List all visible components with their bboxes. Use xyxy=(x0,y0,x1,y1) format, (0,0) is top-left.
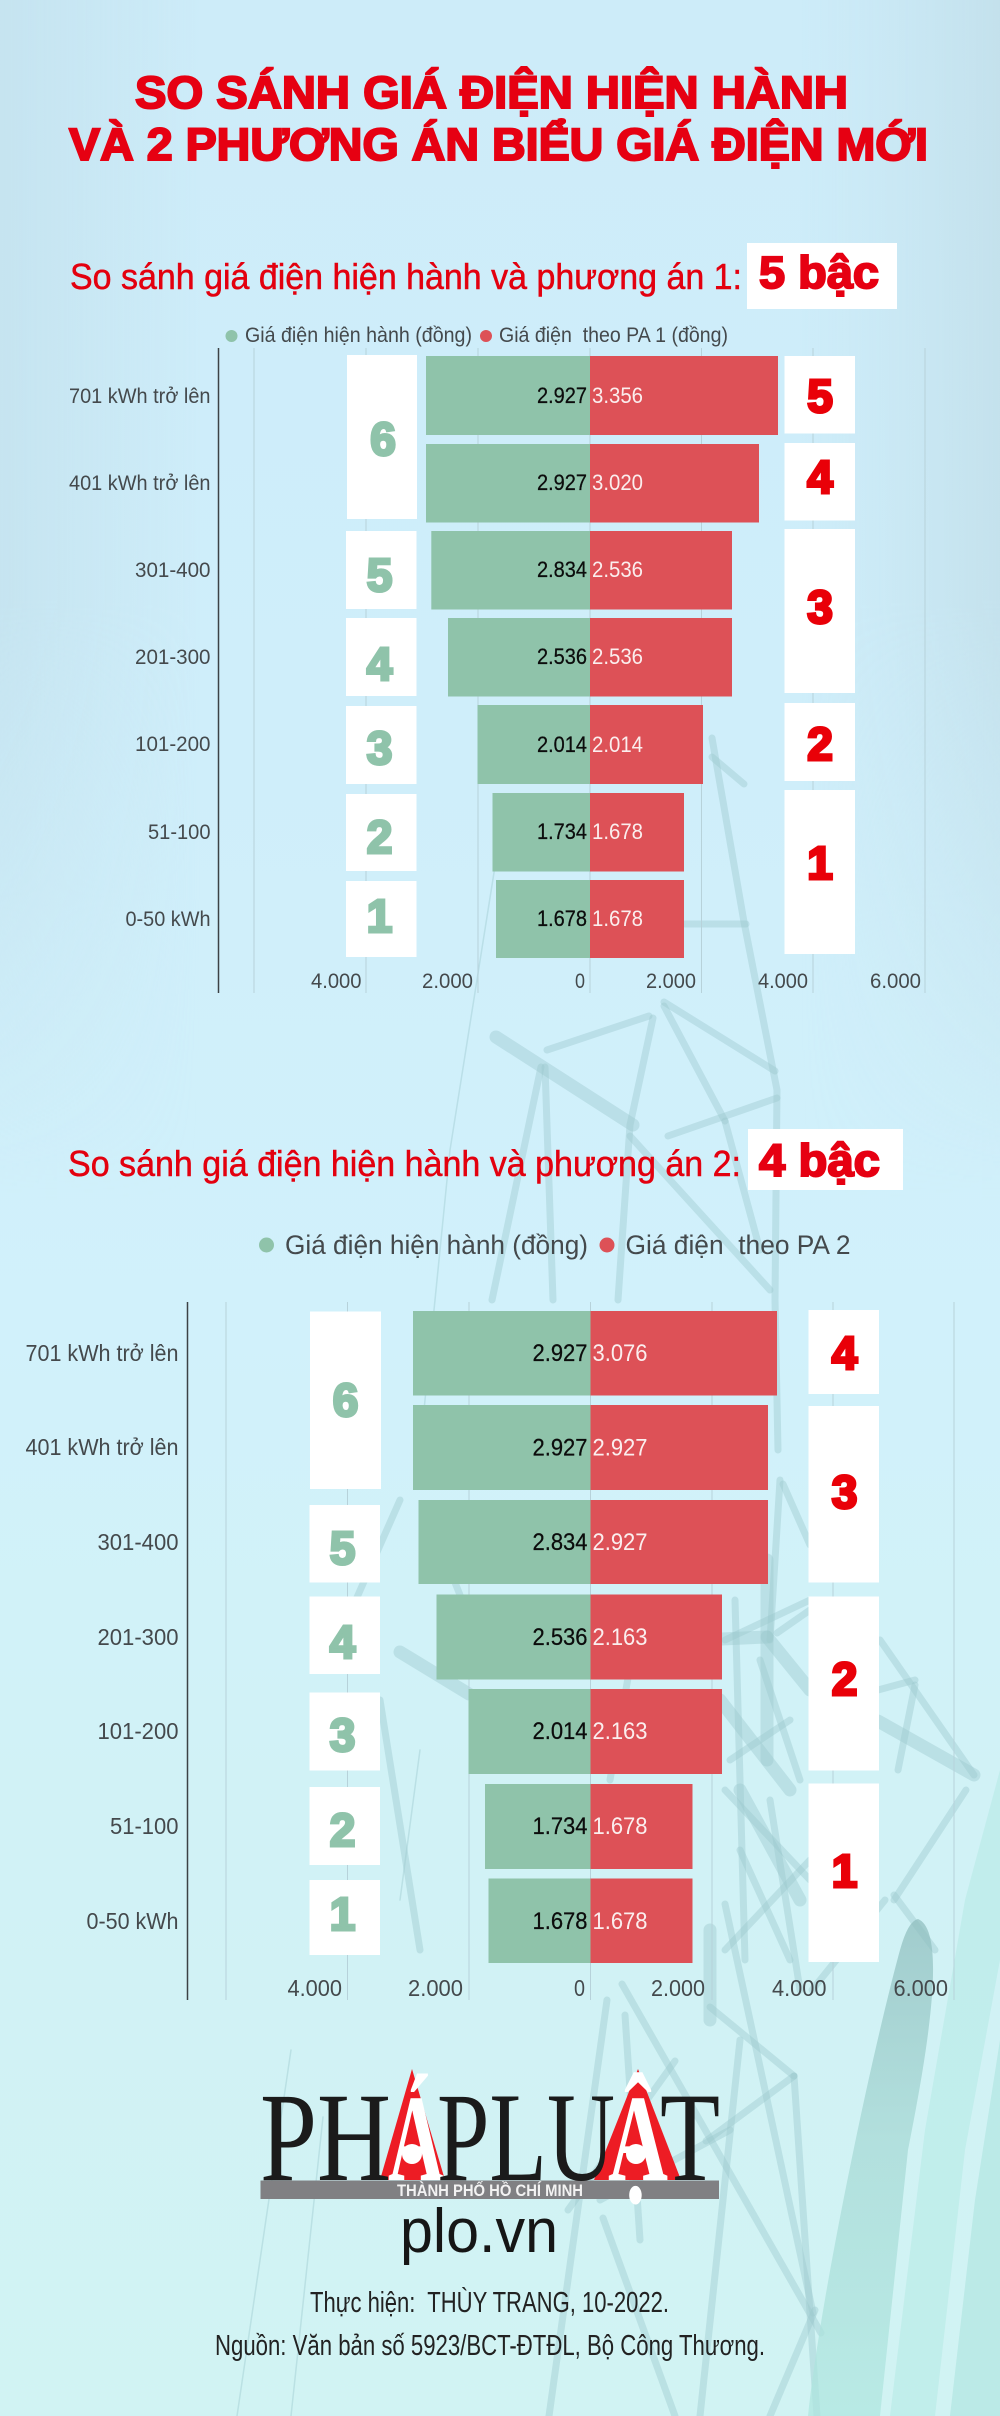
current price bars xyxy=(413,1311,590,1963)
option 2 tier boxes: 2 xyxy=(832,1653,857,1705)
current price tier boxes: 5 xyxy=(330,1522,355,1574)
x axis labels: 6.000 xyxy=(870,969,921,993)
category labels: 101-200 xyxy=(135,732,211,756)
x axis labels: 4.000 xyxy=(288,1975,342,2001)
current price tier boxes: 5 xyxy=(367,549,392,601)
legend: chart 2: Giá điện theo PA 2 xyxy=(626,1230,850,1260)
value labels: 2.014 xyxy=(592,732,643,757)
legend: chart 1: Giá điện hiện hành (đồng) xyxy=(245,324,472,347)
category labels: 701 kWh trở lên xyxy=(69,384,210,408)
bar chart: option 2 xyxy=(26,1302,954,2001)
value labels xyxy=(532,1340,648,1935)
heading: comparison with option 2: 4 bậc xyxy=(759,1135,880,1186)
value labels: 2.834 xyxy=(537,557,587,582)
category labels: 201-300 xyxy=(98,1624,178,1650)
logo: Pháp Luật: THÀNH PHỐ HỒ CHÍ MINH xyxy=(397,2180,583,2200)
value labels: 2.536 xyxy=(532,1624,588,1651)
value labels: 1.734 xyxy=(532,1813,588,1840)
background: insulator xyxy=(808,1770,1000,2416)
option 2 tier boxes: 1 xyxy=(832,1845,857,1897)
value labels: 2.927 xyxy=(532,1434,588,1462)
option 1 tier boxes: 4 xyxy=(807,451,833,503)
option 1 tier boxes: 3 xyxy=(807,581,833,633)
option 1 tier boxes xyxy=(784,356,855,954)
value labels: 2.163 xyxy=(592,1624,648,1651)
option 1 tier boxes: 5 xyxy=(807,370,833,422)
option 1 tier boxes: 2 xyxy=(807,718,833,770)
value labels xyxy=(537,383,643,931)
logo: Pháp Luật: Á xyxy=(388,2070,444,2207)
value labels: 1.678 xyxy=(592,1813,648,1840)
heading: comparison with option 2: So sánh giá điện hiện hành và phương án 2: xyxy=(68,1143,741,1184)
current price tier boxes: 4 xyxy=(367,638,393,690)
value labels: 1.734 xyxy=(537,819,587,844)
x axis labels: 0 xyxy=(574,1975,585,2001)
category labels: 701 kWh trở lên xyxy=(26,1340,178,1366)
option 1 tier boxes: 1 xyxy=(807,837,833,889)
value labels: 2.163 xyxy=(592,1718,648,1745)
credits and source: Nguồn: Văn bản số 5923/BCT-ĐTĐL, Bộ Công Thương. xyxy=(215,2330,765,2362)
current price tier boxes: 3 xyxy=(330,1709,355,1761)
value labels: 2.834 xyxy=(532,1529,588,1556)
value labels: 1.678 xyxy=(592,819,643,844)
x axis labels: 2.000 xyxy=(408,1975,463,2001)
title xyxy=(69,67,928,170)
background: transmission tower silhouette xyxy=(237,738,974,2416)
background gradient xyxy=(0,0,1000,950)
value labels: 2.536 xyxy=(592,557,643,582)
x axis labels: 2.000 xyxy=(646,969,696,993)
x axis labels: 6.000 xyxy=(894,1975,948,2001)
category labels: 201-300 xyxy=(135,645,211,669)
x axis labels: 2.000 xyxy=(651,1975,705,2001)
category labels: 51-100 xyxy=(148,820,211,844)
value labels: 2.927 xyxy=(532,1340,588,1367)
value labels: 2.927 xyxy=(592,1529,648,1556)
category labels xyxy=(26,1340,178,1934)
current price tier boxes: 2 xyxy=(330,1804,355,1856)
value labels: 3.020 xyxy=(592,470,643,495)
current price tier boxes xyxy=(310,1312,381,1955)
category labels: 101-200 xyxy=(98,1718,178,1744)
category labels: 301-400 xyxy=(98,1529,178,1555)
title: SO SÁNH GIÁ ĐIỆN HIỆN HÀNH xyxy=(135,67,848,118)
value labels: 3.356 xyxy=(592,383,643,408)
option 2 tier boxes xyxy=(808,1310,879,1962)
value labels: 2.014 xyxy=(537,732,587,757)
current price tier boxes: 2 xyxy=(367,811,392,863)
bar chart: option 1 xyxy=(69,348,925,993)
x axis labels: 0 xyxy=(575,969,585,993)
heading: comparison with option 1: So sánh giá điện hiện hành và phương án 1: xyxy=(70,256,742,297)
x axis labels: 4.000 xyxy=(311,969,362,993)
legend: chart 2: Giá điện hiện hành (đồng) xyxy=(285,1230,588,1260)
logo: Pháp Luật: PLU xyxy=(437,2068,615,2208)
legend: chart 2 xyxy=(259,1230,850,1260)
option 2 tier boxes: 4 xyxy=(832,1327,858,1379)
logo: Pháp Luật: PH xyxy=(260,2068,391,2208)
value labels: 2.927 xyxy=(537,383,587,408)
heading: comparison with option 1 xyxy=(70,243,897,309)
value labels: 2.927 xyxy=(592,1434,648,1462)
option 2 tier boxes: 3 xyxy=(832,1466,857,1518)
heading: comparison with option 2 xyxy=(68,1129,903,1190)
value labels: 2.014 xyxy=(532,1718,588,1745)
current price tier boxes: 6 xyxy=(333,1374,358,1426)
value labels: 2.536 xyxy=(592,644,643,669)
current price bars xyxy=(426,356,590,958)
category labels: 401 kWh trở lên xyxy=(26,1434,178,1460)
legend: chart 1: Giá điện theo PA 1 (đồng) xyxy=(499,324,728,347)
category labels: 51-100 xyxy=(110,1813,178,1839)
website: plo.vn xyxy=(400,2197,558,2266)
current price tier boxes: 6 xyxy=(370,413,396,465)
value labels: 2.536 xyxy=(537,644,587,669)
credits and source xyxy=(215,2286,765,2362)
value labels: 1.678 xyxy=(537,906,587,931)
logo: Pháp Luật xyxy=(260,2068,720,2208)
category labels: 401 kWh trở lên xyxy=(69,471,210,495)
title: VÀ 2 PHƯƠNG ÁN BIỂU GIÁ ĐIỆN MỚI xyxy=(69,119,928,170)
current price tier boxes xyxy=(346,355,417,957)
x axis labels xyxy=(288,1975,948,2001)
option 1 bars xyxy=(590,356,778,958)
value labels: 3.076 xyxy=(592,1340,648,1367)
current price tier boxes: 3 xyxy=(367,722,392,774)
option 2 bars xyxy=(590,1311,777,1963)
credits and source: Thực hiện: THÙY TRANG, 10-2022. xyxy=(310,2286,669,2319)
current price tier boxes: 1 xyxy=(330,1888,355,1940)
current price tier boxes: 4 xyxy=(330,1616,356,1668)
category labels: 0-50 kWh xyxy=(126,907,210,931)
x axis labels: 2.000 xyxy=(422,969,473,993)
logo: Pháp Luật: Ậ xyxy=(608,2070,668,2207)
x axis labels xyxy=(311,969,921,993)
category labels: 0-50 kWh xyxy=(86,1908,178,1934)
x axis labels: 4.000 xyxy=(772,1975,826,2001)
value labels: 1.678 xyxy=(592,1908,648,1935)
value labels: 1.678 xyxy=(592,906,643,931)
x axis labels: 4.000 xyxy=(758,969,808,993)
category labels xyxy=(69,384,211,931)
current price tier boxes: 1 xyxy=(367,890,392,942)
logo: Pháp Luật: T xyxy=(660,2068,720,2208)
value labels: 1.678 xyxy=(532,1908,588,1935)
value labels: 2.927 xyxy=(537,470,587,495)
heading: comparison with option 1: 5 bậc xyxy=(759,247,879,298)
category labels: 301-400 xyxy=(135,558,211,582)
legend: chart 1 xyxy=(226,324,728,347)
